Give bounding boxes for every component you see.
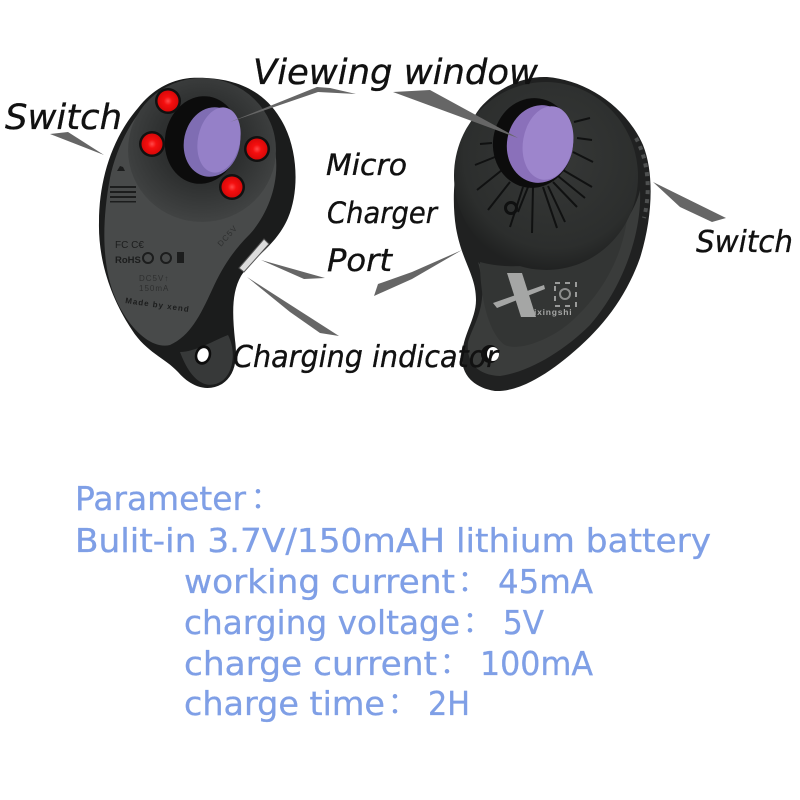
label markings: DC5V↑ (139, 274, 169, 283)
label markings: DC5V (216, 223, 239, 248)
label: micro charger port: Micro (326, 148, 407, 182)
lens recess (487, 93, 579, 193)
right device: front view (446, 74, 651, 391)
label: micro charger port: Port (327, 243, 394, 279)
charging voltage: 5V (503, 603, 544, 642)
device callout labels (5, 53, 793, 375)
pointer arrows (50, 87, 726, 336)
charge current: ： (432, 640, 462, 684)
key ring hole (192, 343, 214, 367)
device body outline (454, 77, 651, 391)
charge time: ： (380, 680, 410, 724)
arrow: micro port right device (374, 250, 462, 296)
charge current: 100mA (480, 644, 593, 683)
viewing window lens (501, 100, 579, 188)
radial ribs (475, 118, 593, 233)
side grip dots (636, 138, 648, 218)
label markings: RoHS (115, 255, 141, 266)
label: switch right: Switch (696, 225, 793, 260)
heading: parameter: ： (243, 475, 273, 519)
left device: back view (99, 78, 296, 388)
working current: 45mA (498, 562, 593, 601)
label markings: 150mA (139, 284, 169, 293)
micro charger port (239, 239, 269, 272)
label markings (110, 166, 239, 314)
charge time: charge time (184, 684, 385, 723)
charging voltage (184, 599, 544, 643)
label: micro charger port (326, 148, 439, 279)
small embossed circle (506, 202, 516, 214)
X logo (493, 273, 576, 317)
raised dome (128, 78, 276, 222)
key ring lobe (180, 335, 233, 385)
label: charging indicator: Charging indicator (233, 340, 500, 375)
arrow: micro port left device (261, 260, 325, 279)
red LEDs (139, 88, 270, 200)
device body outline (99, 78, 296, 388)
charge current (184, 640, 593, 684)
working current (184, 558, 593, 602)
arrow: switch right (653, 182, 726, 222)
X logo: Cixingshi (527, 307, 572, 317)
dome (446, 74, 646, 278)
arrow: charging indicator (247, 277, 339, 336)
charging voltage: ： (455, 599, 485, 643)
lens recess (158, 90, 246, 190)
charge time (184, 680, 470, 724)
arrow: viewing window right (393, 90, 518, 138)
label markings: FC C€ (115, 240, 144, 251)
label markings: Made by xend (125, 296, 190, 314)
charge time: 2H (428, 684, 470, 723)
charging voltage: charging voltage (184, 603, 460, 642)
heading: parameter: Parameter (75, 479, 246, 518)
viewing window lens (177, 102, 247, 182)
device grey face (104, 86, 276, 346)
battery line: Bulit-in 3.7V/150mAH lithium battery (75, 521, 711, 560)
arrow: switch left (50, 132, 104, 155)
lower face (468, 190, 640, 376)
key ring hole (481, 345, 499, 363)
charge current: charge current (184, 644, 437, 683)
label: micro charger port: Charger (327, 196, 439, 230)
label: viewing window: Viewing window (253, 53, 538, 93)
label: switch left: Switch (5, 98, 122, 138)
working current: ： (450, 558, 480, 602)
arrow: viewing window left (230, 87, 356, 122)
inner raised section (480, 195, 628, 347)
parameter text block (75, 475, 711, 724)
working current: working current (184, 562, 455, 601)
